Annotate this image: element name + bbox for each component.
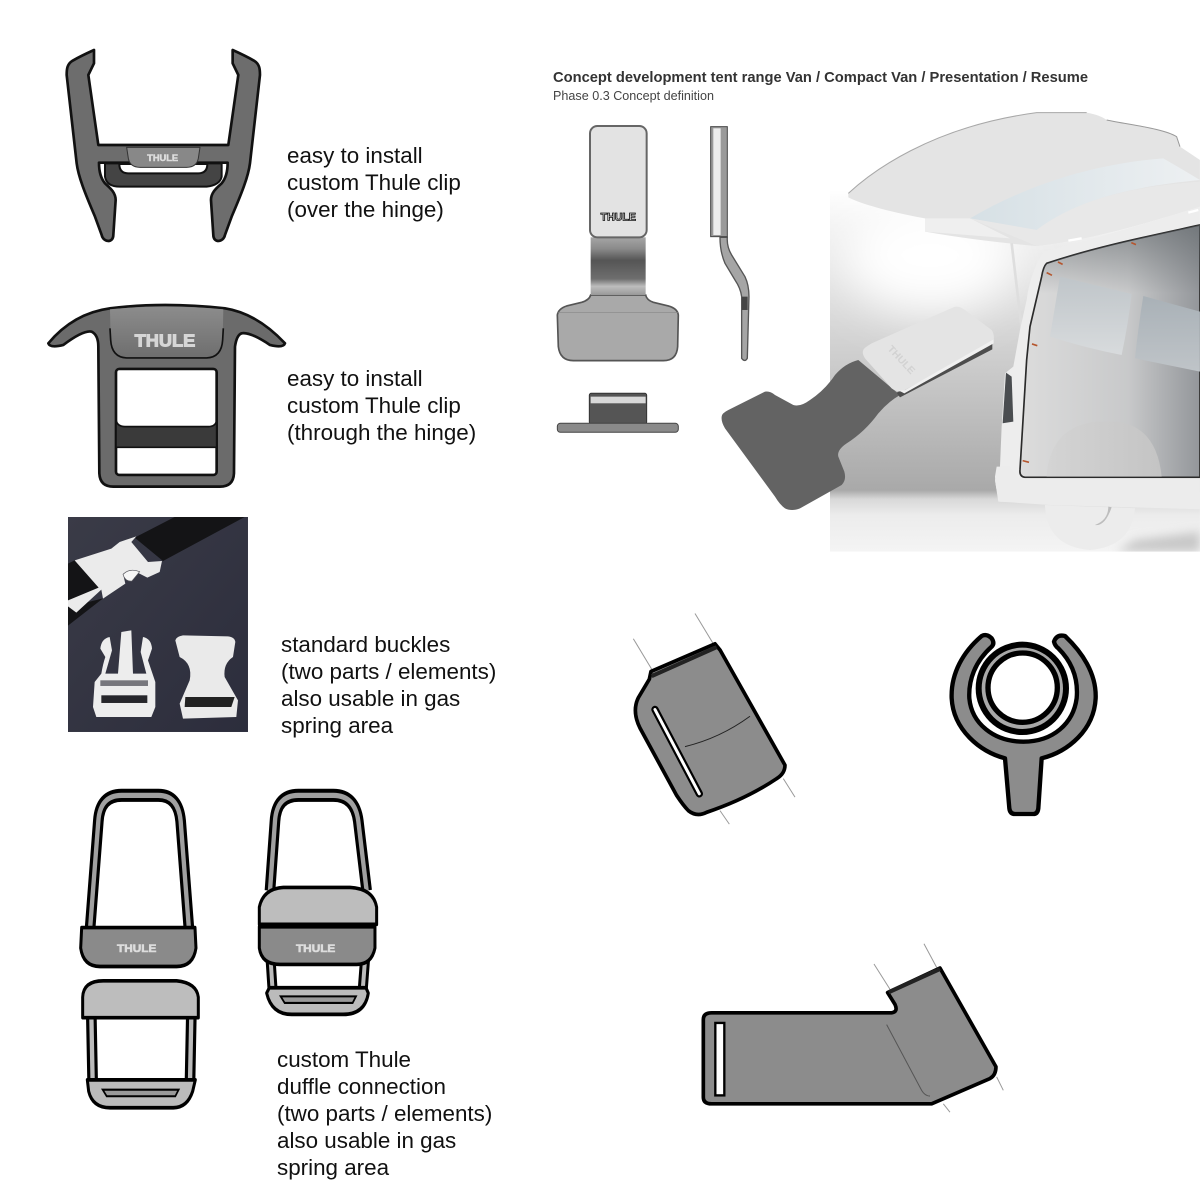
studio background <box>830 190 1200 552</box>
tail light <box>1003 373 1013 423</box>
part one: arch with logo band <box>81 795 196 966</box>
part two: cap with loop <box>83 981 198 1108</box>
strap <box>68 517 245 626</box>
technical drawing: top view <box>557 393 678 432</box>
caption: custom Thule duffle connection: also usable in gas <box>277 1128 456 1153</box>
tailgate <box>848 113 1200 246</box>
caption: standard buckles: also usable in gas <box>281 686 460 711</box>
bumper <box>995 467 1200 509</box>
duffle connection: assembled <box>259 795 377 1014</box>
caption: over the hinge: easy to install <box>287 143 423 168</box>
wheel <box>1045 505 1128 508</box>
female buckle part <box>175 635 238 719</box>
clip 3D view: THULE <box>885 344 917 377</box>
technical drawing: side view <box>711 127 749 360</box>
caption: custom Thule duffle connection: custom Thule <box>277 1047 411 1072</box>
render: van with open tailgate <box>830 113 1200 552</box>
caption: standard buckles: spring area <box>281 713 394 738</box>
hinges <box>1068 210 1198 241</box>
caption: standard buckles: (two parts / elements) <box>281 659 496 684</box>
heading: concept development <box>553 70 1088 103</box>
caption: custom Thule duffle connection: spring area <box>277 1155 390 1180</box>
technical drawing: front view: THULE <box>601 211 636 223</box>
heading: concept development: Concept development tent range Van / Compact Van / Presentation / Resume <box>553 70 1088 86</box>
caption: custom Thule duffle connection: (two parts / elements) <box>277 1101 492 1126</box>
inner wheel arch <box>1046 431 1162 477</box>
caption: through the hinge: custom Thule clip <box>287 393 461 418</box>
caption: through the hinge: (through the hinge) <box>287 420 476 445</box>
line drawing: angled clip <box>633 613 795 824</box>
clip illustration: over the hinge <box>67 50 260 241</box>
caption: custom Thule duffle connection <box>277 1047 492 1180</box>
clip 3D view <box>722 307 994 510</box>
line drawing: ring fork clip <box>952 635 1096 814</box>
duffle connection: separated parts <box>81 795 198 1108</box>
clip illustration: over the hinge: THULE <box>147 153 178 163</box>
heading: concept development: Phase 0.3 Concept definition <box>553 89 714 103</box>
caption: over the hinge: (over the hinge) <box>287 197 444 222</box>
clip illustration: through the hinge: THULE <box>135 331 195 351</box>
closed buckle <box>68 536 162 613</box>
part one: arch with logo band: THULE <box>117 943 156 955</box>
windows <box>1052 282 1130 355</box>
fixing clips <box>1023 243 1136 462</box>
caption: through the hinge: easy to install <box>287 366 423 391</box>
caption: standard buckles: standard buckles <box>281 632 450 657</box>
photo: standard buckles <box>68 517 248 732</box>
caption: through the hinge <box>287 366 476 445</box>
line drawing: long clip with bend <box>703 944 1003 1112</box>
van body <box>995 207 1200 508</box>
male buckle part <box>93 630 155 717</box>
caption: over the hinge <box>287 143 461 222</box>
clip illustration: through the hinge <box>48 305 285 487</box>
interior <box>1020 225 1200 477</box>
duffle connection: assembled: THULE <box>296 943 335 955</box>
caption: over the hinge: custom Thule clip <box>287 170 461 195</box>
technical drawing: front view <box>557 126 678 361</box>
caption: standard buckles <box>281 632 496 738</box>
caption: custom Thule duffle connection: duffle connection <box>277 1074 446 1099</box>
gas strut <box>1010 244 1018 292</box>
